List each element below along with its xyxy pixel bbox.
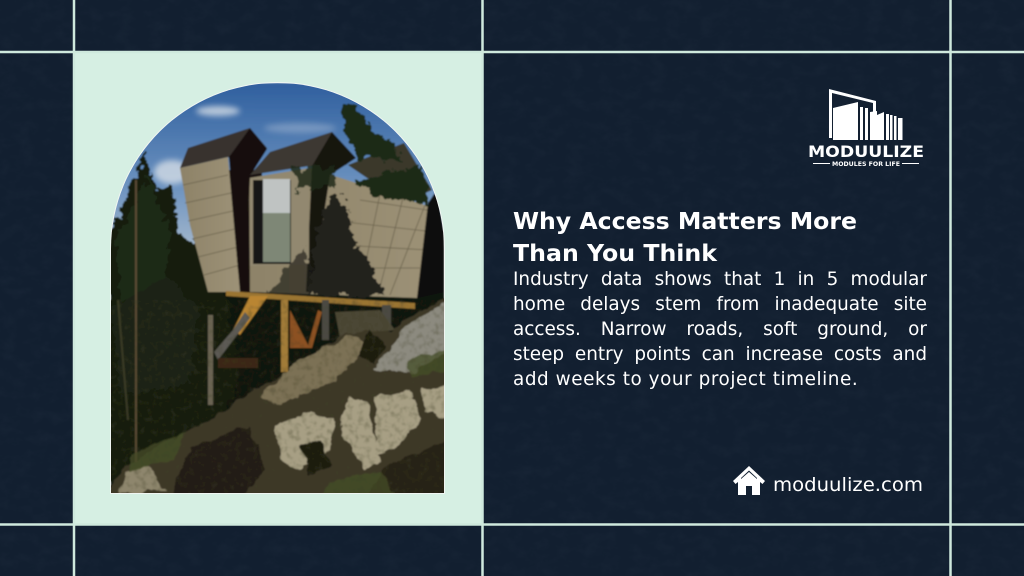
body text: home delays stem from inadequate site (513, 294, 927, 315)
body text: Industry data shows that 1 in 5 modular (513, 269, 927, 290)
dark roofs and side fins (180, 128, 267, 173)
logo: Moduulize (808, 89, 924, 168)
tree shadow on wall (265, 195, 386, 296)
body text: add weeks to your project timeline. (513, 369, 858, 390)
window (250, 168, 309, 266)
pine branches top right (292, 104, 432, 205)
deck and stilts (226, 291, 415, 309)
base: dark forest behind the deck (111, 291, 444, 486)
heading: Why Access Matters More (513, 209, 857, 235)
dark gap behind the cabin (228, 170, 262, 296)
body text: steep entry points can increase costs and (513, 344, 927, 365)
heading (513, 209, 857, 267)
sky (112, 83, 443, 246)
body text (513, 269, 927, 390)
photo: arch-shaped cabin on rocks (105, 82, 450, 498)
tagline: MODULES FOR LIFE (832, 160, 900, 168)
rock cracks and vegetation shadows (170, 330, 450, 498)
url: moduulize.com (773, 474, 923, 496)
house walls (180, 157, 240, 292)
background forest left (108, 150, 240, 490)
icon: house (733, 466, 765, 495)
shingle seams (183, 170, 440, 295)
wordmark: MODUULIZE (808, 142, 924, 161)
panel: mint photo panel (74, 52, 482, 524)
rock hillside (105, 295, 450, 498)
heading: Than You Think (513, 241, 718, 267)
icon: building outline (829, 89, 902, 140)
photo grain (111, 300, 444, 493)
website link (733, 466, 923, 496)
body text: access. Narrow roads, soft ground, or (513, 319, 927, 340)
